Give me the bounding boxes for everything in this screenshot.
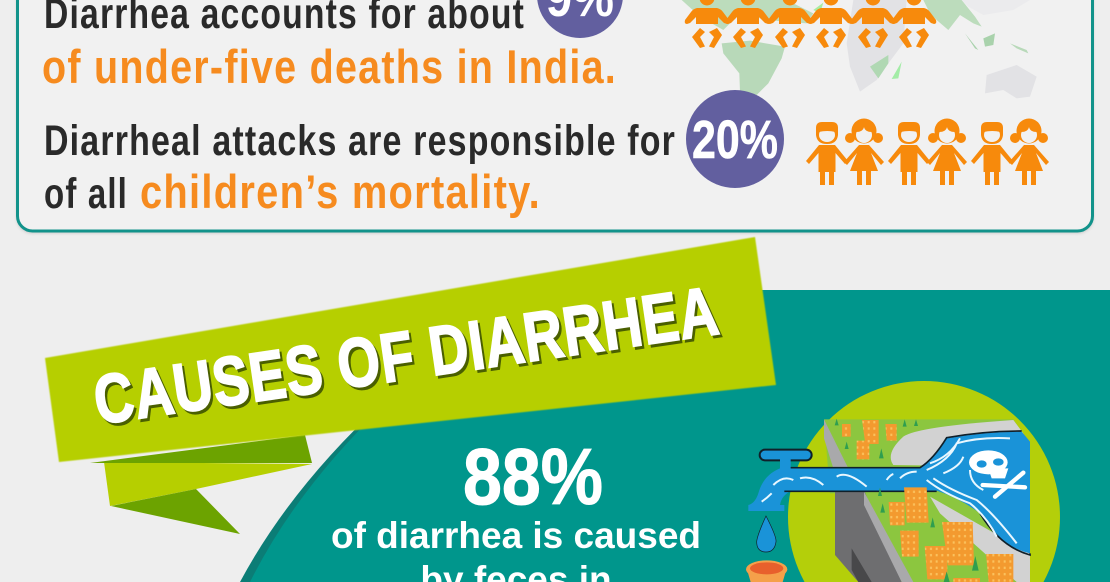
text: children's mortality: of all [44, 170, 128, 218]
icon: row of babies [685, 0, 936, 48]
panel: diarrhea statistics [17, 0, 1093, 233]
badge: 20 percent: 20% [692, 110, 778, 170]
bucket [746, 560, 787, 582]
water drop [757, 516, 776, 552]
badge: 9 percent [537, 0, 623, 38]
heading text: CAUSES OF DIARRHEA [91, 275, 726, 442]
text: responsible line: Diarrheal attacks are responsible for [44, 117, 676, 165]
statistic: 88 percent: 88% [463, 432, 603, 521]
ribbon front [45, 237, 776, 462]
icon: children holding hands [806, 118, 1049, 185]
tap handle [760, 450, 812, 460]
skull and crossbones [969, 450, 1025, 497]
water lines [762, 438, 1017, 543]
ribbon tail [90, 435, 312, 534]
map: world map backdrop [682, 0, 1037, 98]
ribbon: causes of diarrhea heading [45, 237, 776, 534]
illustration: polluted tap water [746, 381, 1060, 582]
caption: of diarrhea is caused [331, 515, 701, 556]
trees [835, 419, 979, 582]
lime circle [788, 381, 1060, 582]
land [824, 419, 1030, 582]
caption [331, 515, 701, 582]
road [891, 420, 1023, 467]
water edges [784, 431, 1030, 555]
panel: causes teal background [240, 290, 1110, 582]
badge: 20 percent [686, 90, 784, 188]
toxic water [748, 432, 1030, 553]
buildings [842, 420, 1013, 582]
text: children's mortality: children’s mortality. [140, 165, 541, 218]
statistic: 88 percent [331, 432, 701, 582]
heading text [89, 272, 726, 442]
heading text: CAUSES OF DIARRHEA [89, 272, 724, 439]
text: under-five deaths: of under-five deaths in India. [42, 40, 617, 93]
